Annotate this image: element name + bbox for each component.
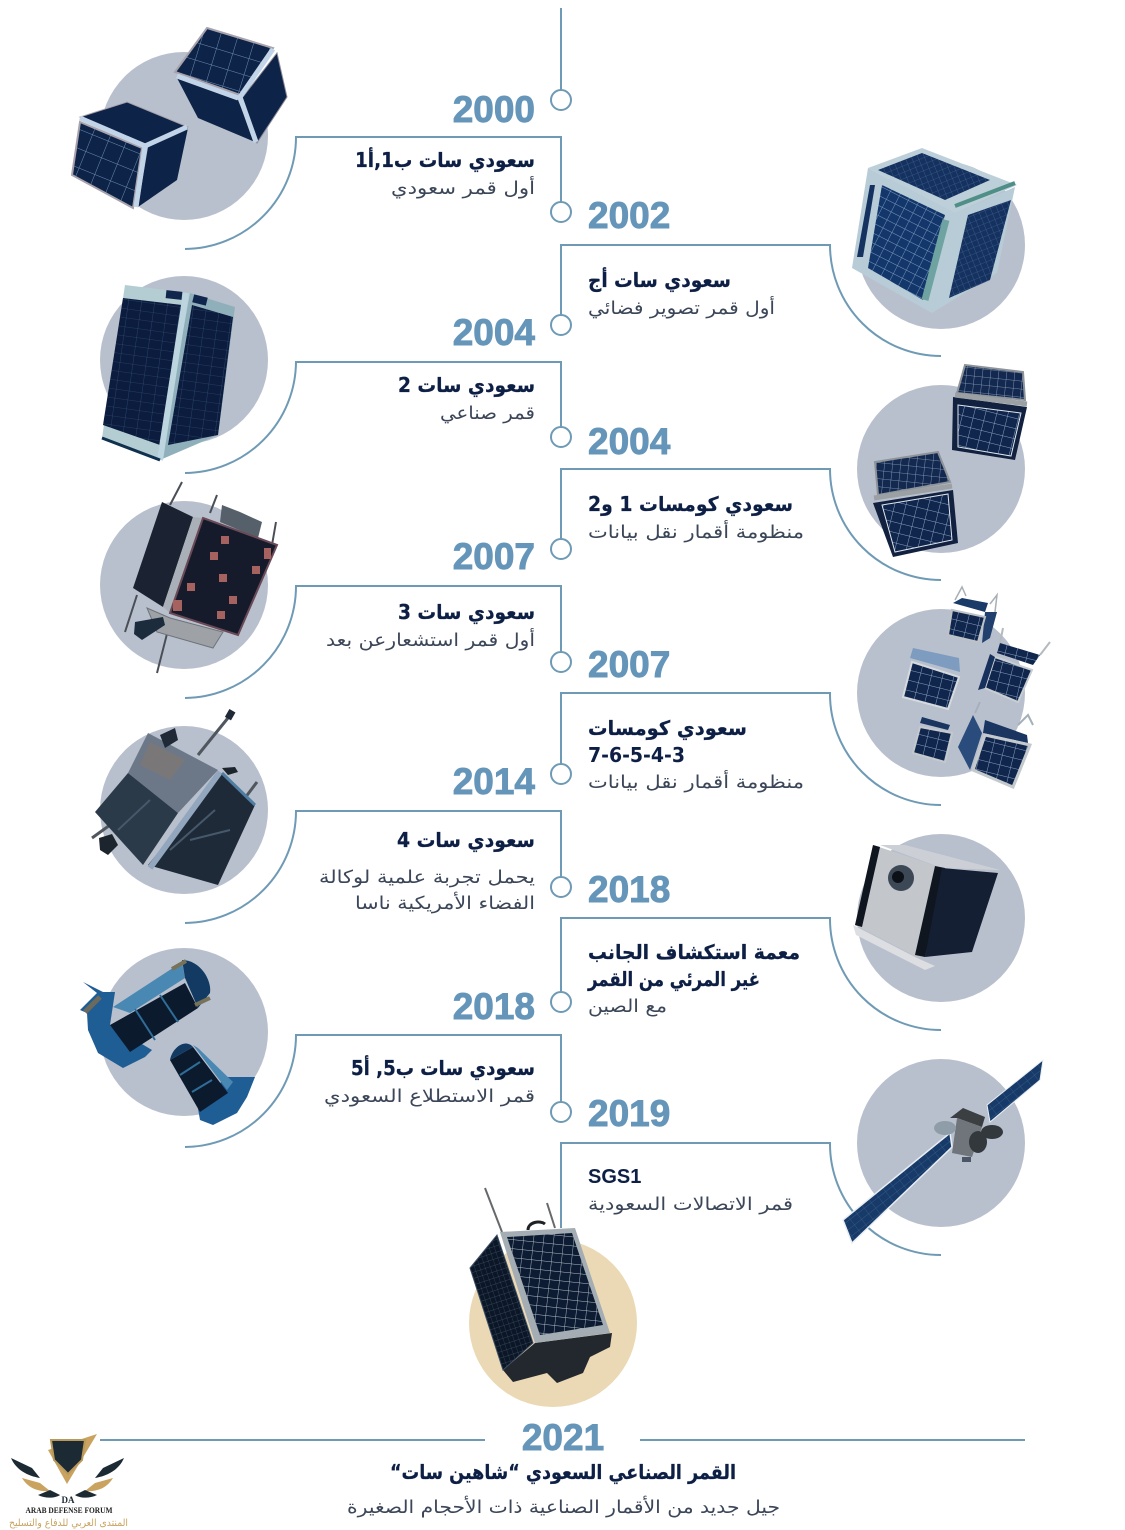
- panel: 2021 Shaheen Sat: [100, 1188, 1025, 1518]
- title: سعودي كومسات: [588, 716, 747, 741]
- year: 2007: [453, 536, 535, 577]
- description: أول قمر استشعارعن بعد: [326, 628, 535, 651]
- year: 2000: [453, 89, 535, 130]
- panel: 2014 Saudisat 4: [92, 709, 571, 923]
- description: أول قمر تصوير فضائي: [588, 296, 775, 319]
- icon: twin cube satellites: [72, 28, 287, 208]
- year: 2007: [588, 644, 670, 685]
- title: سعودي سات ب1,أ1: [355, 146, 535, 173]
- icon: two cube satellites: [873, 365, 1027, 557]
- icon: remote sensing satellite: [125, 482, 277, 673]
- description: منظومة أقمار نقل بيانات: [588, 770, 804, 793]
- year: 2014: [453, 761, 535, 802]
- panel: 2004 Saudisat 2: [100, 276, 571, 473]
- icon: dark box satellite: [92, 709, 257, 885]
- icon: Shaheen Sat small satellite: [470, 1188, 612, 1383]
- title: سعودي سات 4: [397, 828, 535, 853]
- description: قمر الاستطلاع السعودي: [324, 1086, 535, 1107]
- year: 2021: [522, 1417, 604, 1458]
- icon: communications satellite with solar panels: [843, 1060, 1043, 1243]
- icon: two blue cylindrical satellites: [80, 960, 255, 1125]
- description: قمر الاتصالات السعودية: [588, 1194, 793, 1215]
- title line 2: غير المرئي من القمر: [587, 967, 760, 992]
- title line 1: معمة استكشاف الجانب: [588, 940, 800, 964]
- description line 1: يحمل تجربة علمية لوكالة: [319, 867, 535, 888]
- icon: cube satellite: [852, 148, 1017, 313]
- panel: 2018 lunar far side mission: [551, 834, 1025, 1030]
- description: جيل جديد من الأقمار الصناعية ذات الأحجام الصغيرة: [347, 1496, 780, 1518]
- title: القمر الصناعي السعودي “شاهين سات“: [390, 1460, 736, 1485]
- timeline start line: [560, 8, 562, 90]
- description: أول قمر سعودي: [391, 176, 535, 199]
- panel: 2007 Saudisat 3: [100, 482, 571, 698]
- description: مع الصين: [588, 996, 667, 1017]
- year: 2002: [588, 195, 670, 236]
- panel: 2002 imaging satellite: [551, 148, 1025, 356]
- icon: silver box payload: [853, 845, 1000, 970]
- logo arabic name: المنتدى العربي للدفاع والتسليح: [9, 1518, 128, 1529]
- year: 2018: [588, 869, 670, 910]
- panel: 2004 Saudicomsat 1 and 2: [551, 365, 1027, 580]
- timeline right rule: [640, 1439, 1025, 1441]
- panel: 2007 Saudicomsat 3-7: [551, 587, 1050, 805]
- description: منظومة أقمار نقل بيانات: [588, 520, 804, 543]
- title: سعودي سات أج: [588, 266, 731, 293]
- logo: Arab Defense Forum: [9, 1434, 128, 1529]
- panel: 2019 SGS1: [551, 1059, 1043, 1255]
- timeline left rule: [100, 1439, 485, 1441]
- logo initials: DA: [62, 1495, 75, 1505]
- title numbers: 7-6-5-4-3: [588, 743, 685, 767]
- title: سعودي سات 2: [398, 373, 535, 398]
- panel: 2000 first Saudi satellite: [72, 28, 571, 249]
- year: 2004: [453, 312, 535, 353]
- title: SGS1: [588, 1166, 641, 1188]
- title: سعودي سات ب5, أ5: [351, 1054, 535, 1081]
- description line 2: الفضاء الأمريكية ناسا: [355, 892, 535, 914]
- year: 2018: [453, 986, 535, 1027]
- panel: 2018 Saudisat 5A 5B: [80, 948, 571, 1147]
- icon: tall box satellite: [102, 285, 235, 460]
- title: سعودي سات 3: [398, 600, 535, 625]
- year: 2004: [588, 421, 671, 462]
- title: سعودي كومسات 1 و2: [588, 492, 793, 517]
- year: 2019: [588, 1093, 670, 1134]
- logo english name: ARAB DEFENSE FORUM: [26, 1506, 113, 1515]
- icon: five small cube satellites: [903, 587, 1050, 787]
- description: قمر صناعي: [440, 403, 535, 424]
